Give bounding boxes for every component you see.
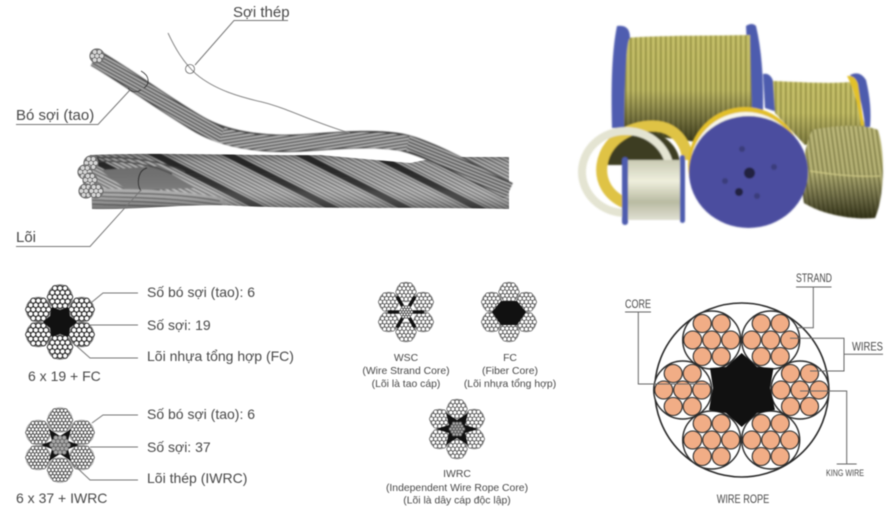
- strands: [654, 311, 829, 469]
- labels: 6 x 37 + IWRC: Số sợi: 37: [147, 439, 211, 455]
- core type: FC: FC: [503, 353, 517, 364]
- blue drum face: [689, 116, 808, 228]
- label: Lõi: Lõi: [16, 229, 36, 246]
- label: WIRES: [790, 338, 883, 371]
- labels: 6 x 19 + FC: 6 x 19 + FC: [28, 368, 101, 384]
- diagram: wire rope cross-section: [654, 303, 829, 477]
- core type: IWRC: IWRC: [443, 469, 471, 480]
- right spool: [763, 73, 870, 145]
- label: STRAND: STRAND: [796, 271, 832, 285]
- unwound strand: [95, 58, 509, 191]
- core type: FC: (Fiber Core): [482, 366, 538, 377]
- rope end cross-section: [77, 48, 105, 199]
- labels: 6 x 19 + FC: Số bó sợi (tao): 6: [147, 284, 255, 300]
- white ring: [582, 131, 670, 213]
- labels: 6 x 37 + IWRC: 6 x 37 + IWRC: [16, 490, 107, 506]
- fiber core: [709, 353, 775, 427]
- label: Sợi thép: Sợi thép: [233, 4, 290, 21]
- wire coil: [802, 126, 883, 218]
- label: Bó sợi (tao): [16, 90, 130, 124]
- core type: IWRC: [386, 399, 528, 506]
- yellow and white rim of drum: [688, 107, 802, 223]
- photo: spools of wire rope: [582, 24, 883, 228]
- caption: WIRE ROPE: WIRE ROPE: [717, 492, 769, 506]
- cross-section: 6 x 19 + FC: [26, 284, 94, 360]
- labels: 6 x 37 + IWRC: Lõi thép (IWRC): [147, 470, 247, 486]
- label: Sợi thép: [195, 4, 290, 65]
- core type: FC: (Lõi nhựa tổng hợp): [464, 378, 556, 390]
- label: Lõi: [16, 190, 141, 246]
- label: Bó sợi (tao): Bó sợi (tao): [16, 107, 94, 124]
- steel wire: [168, 33, 350, 133]
- labels: 6 x 19 + FC: [28, 284, 294, 384]
- label: STRAND: [796, 271, 832, 328]
- core type: FC: [464, 282, 556, 390]
- labels: 6 x 37 + IWRC: [16, 406, 255, 506]
- label: KING WIRE: KING WIRE: [826, 468, 864, 478]
- illustration: wire rope with unwound strand: [77, 33, 510, 212]
- core type: IWRC: (Independent Wire Rope Core): [386, 483, 528, 494]
- labels: 6 x 19 + FC: Số sợi: 19: [147, 317, 211, 333]
- label: CORE: CORE: [625, 297, 651, 311]
- annotation rings: [128, 64, 194, 191]
- yellow reel ring: [602, 126, 687, 203]
- outer rope circle: [655, 303, 829, 477]
- large spool: [612, 24, 763, 145]
- label: KING WIRE: [800, 391, 864, 478]
- label: CORE: [625, 297, 710, 384]
- labels: 6 x 19 + FC: Lõi nhựa tổng hợp (FC): [147, 348, 294, 364]
- main rope body: [90, 153, 510, 210]
- core type: WSC: (Wire Strand Core): [362, 366, 450, 377]
- core type: WSC: (Lõi là tao cáp): [372, 379, 440, 390]
- small silver spool: [622, 155, 685, 225]
- ring interior shadow: [606, 132, 681, 166]
- core type: WSC: WSC: [394, 353, 419, 364]
- core type: IWRC: (Lõi là dây cáp độc lập): [403, 496, 511, 506]
- cross-section: 6 x 37 + IWRC: [25, 407, 95, 483]
- core type: WSC: [362, 282, 450, 390]
- labels: 6 x 37 + IWRC: Số bó sợi (tao): 6: [147, 406, 255, 422]
